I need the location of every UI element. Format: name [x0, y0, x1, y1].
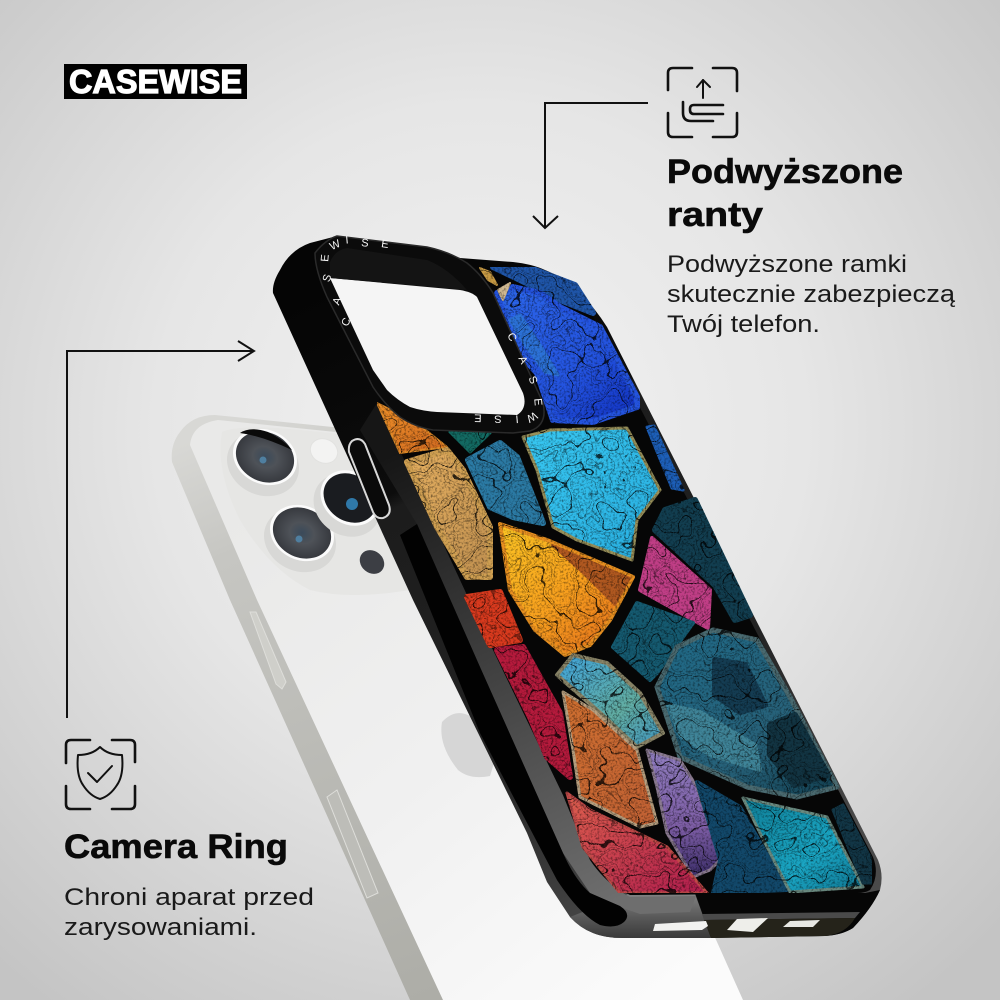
bottom olive edge [704, 918, 855, 938]
ring lettering: E [380, 238, 389, 251]
ring lettering [319, 234, 544, 425]
ring lettering: W [328, 238, 343, 253]
ring lettering: E [319, 254, 332, 262]
ring inner wall [330, 248, 467, 290]
ring lettering: S [361, 237, 369, 250]
phone case [273, 234, 882, 938]
phone button upper [250, 612, 286, 689]
volume button cutout [349, 439, 390, 518]
phone button lower [327, 790, 378, 898]
ring lettering: W [524, 409, 539, 425]
lens 3 [301, 459, 393, 550]
ring lettering: S [526, 375, 539, 386]
text: raised edges description: skutecznie zabezpieczą [667, 281, 956, 308]
logo: CASEWISE [69, 63, 242, 100]
text: camera ring description: Chroni aparat przed [64, 884, 314, 911]
text: camera ring description: zarysowaniami. [64, 914, 257, 941]
arrow: left, to camera ring [67, 341, 254, 718]
white phone [172, 415, 743, 1000]
ring lettering: I [345, 234, 349, 247]
camera ring [315, 236, 544, 433]
heading: camera ring: Camera Ring [64, 828, 288, 866]
microphone [355, 545, 389, 579]
inner rim band [360, 403, 696, 914]
heading: raised edges: ranty [667, 196, 763, 234]
camera plateau [220, 427, 410, 595]
ring lettering: E [531, 398, 544, 406]
phone back [190, 420, 743, 1000]
ring lettering: C [504, 331, 519, 343]
icon: shield [66, 740, 135, 809]
heading: raised edges: Podwyższone [667, 153, 903, 191]
ring lettering: C [339, 316, 354, 328]
bottom grey bezel highlight [702, 912, 860, 920]
port 2 [727, 918, 768, 932]
lens 1 [216, 419, 310, 508]
camera window [330, 278, 525, 415]
text: raised edges description [667, 251, 956, 338]
bottom black bezel [695, 890, 880, 938]
ring lettering: E [474, 411, 482, 424]
port 1 [653, 921, 708, 931]
bottom grey bezel [570, 894, 711, 938]
ring lettering: S [494, 412, 502, 424]
back plate [377, 263, 876, 895]
artwork: mosaic stones [377, 267, 872, 893]
long side slot [400, 524, 627, 926]
apple logo [441, 713, 495, 777]
icon: raised edges [668, 68, 737, 137]
ring lettering: I [515, 412, 519, 425]
flash [306, 434, 342, 468]
port 3 [783, 920, 820, 927]
text: raised edges description: Twój telefon. [667, 311, 820, 338]
text: raised edges description: Podwyższone ramki [667, 251, 907, 278]
ring lettering: A [516, 354, 530, 367]
lens 2 [253, 495, 347, 584]
heading: raised edges [667, 153, 903, 234]
ring lettering: A [331, 295, 345, 307]
arrow: top, to raised edges [533, 103, 648, 228]
text: camera ring description [64, 884, 314, 941]
phone side band [172, 415, 600, 1000]
ring lettering: S [321, 273, 334, 284]
case body [273, 236, 882, 938]
